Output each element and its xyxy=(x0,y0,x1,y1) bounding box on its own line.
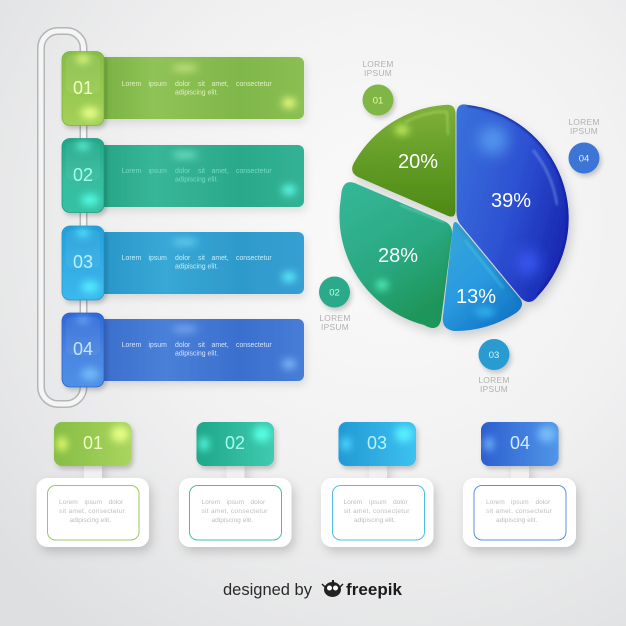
banner 02 text: sit xyxy=(198,168,205,175)
banner 04 text: adipiscing elit. xyxy=(175,350,218,358)
banner 04 text: dolor xyxy=(175,342,191,349)
icon: freepik mascot xyxy=(322,580,343,597)
banner 02 text: ipsum xyxy=(148,168,167,175)
badge xyxy=(319,276,350,308)
card text: sit amet, consectetur xyxy=(202,508,268,515)
slice: 13% light blue: 13% xyxy=(456,286,496,308)
caption: IPSUM xyxy=(480,384,508,394)
card text: adipiscing elit. xyxy=(70,517,111,524)
button 04 xyxy=(481,422,558,466)
inner outline xyxy=(474,486,566,540)
card text: Lorem xyxy=(202,499,221,506)
pipe connector xyxy=(41,31,84,404)
tab 02 number: 02 xyxy=(73,165,93,185)
card text: adipiscing elit. xyxy=(212,517,253,524)
card body xyxy=(179,462,292,547)
banner 04 text: ipsum xyxy=(148,342,167,349)
tab 01 xyxy=(62,52,104,126)
button number: 04 xyxy=(510,433,530,453)
banner 03 text: dolor xyxy=(175,255,191,262)
card text: ipsum xyxy=(84,499,103,506)
banner 01 text: Lorem xyxy=(122,81,141,88)
tab 02 xyxy=(62,138,104,212)
banner 04 text: consectetur xyxy=(236,342,272,349)
tab 03 gloss xyxy=(66,229,100,293)
caption: IPSUM xyxy=(570,126,598,136)
pie label 04: 04 xyxy=(579,154,589,164)
banner 03 xyxy=(90,232,304,294)
card text: ipsum xyxy=(369,499,387,506)
banner 03 text: consectetur xyxy=(236,255,272,262)
card 02 xyxy=(179,422,292,547)
banner 03 text: adipiscing elit. xyxy=(175,264,218,270)
slice: 28% teal: 28% xyxy=(378,245,418,267)
tab 04 xyxy=(62,313,104,387)
badge xyxy=(478,339,510,370)
panel: row 01 xyxy=(62,52,304,126)
tab 01 gloss xyxy=(66,55,100,119)
banner 02 text: consectetur xyxy=(236,168,272,175)
footer credit xyxy=(223,580,403,599)
card 03 xyxy=(321,422,434,547)
banner 02 text: amet, xyxy=(212,168,229,175)
banner 02 text: adipiscing elit. xyxy=(175,176,218,184)
banner 02 xyxy=(90,145,304,207)
caption: LOREM xyxy=(568,117,600,127)
pie label 03: 03 xyxy=(489,350,499,361)
banner 02 glows xyxy=(172,152,296,195)
panel: row 03 xyxy=(62,226,304,300)
banner 03 text: ipsum xyxy=(148,255,167,262)
button 01 xyxy=(54,422,132,466)
banner 01 text: dolor xyxy=(175,81,191,88)
button 03 xyxy=(338,422,416,466)
slice: 20% green xyxy=(352,105,456,217)
banner 01 text: adipiscing elit. xyxy=(175,90,218,96)
badge xyxy=(568,142,600,174)
card text: sit amet, consectetur xyxy=(486,508,553,515)
banner 01 text: consectetur xyxy=(236,81,272,88)
button gloss xyxy=(484,426,556,451)
card text: sit amet, consectetur xyxy=(344,508,410,515)
caption: LOREM xyxy=(362,59,394,69)
button number: 01 xyxy=(83,433,103,453)
banner 01 text: ipsum xyxy=(148,81,167,88)
tab 04 number: 04 xyxy=(73,339,93,359)
card body xyxy=(36,462,149,547)
card text: Lorem xyxy=(344,499,363,506)
banner 04 text: sit xyxy=(198,342,205,349)
pie label 02: 02 xyxy=(329,288,340,298)
pie label 03 xyxy=(478,339,510,394)
tab 01 number: 01 xyxy=(73,78,93,98)
card text: Lorem xyxy=(486,499,505,506)
card text: adipiscing elit. xyxy=(496,517,538,524)
badge xyxy=(362,84,394,116)
banner 02 text: Lorem xyxy=(122,168,141,175)
card body xyxy=(463,462,576,547)
card text: Lorem xyxy=(59,499,78,506)
freepik wordmark: freepik xyxy=(346,580,403,599)
pie label 04 xyxy=(568,117,600,174)
caption: LOREM xyxy=(319,313,351,323)
card 01 xyxy=(36,422,149,547)
pie label 01 xyxy=(362,59,394,116)
panel: row 02 xyxy=(62,138,304,212)
panel: row 04 xyxy=(62,313,304,387)
card 04 xyxy=(463,422,576,547)
banner 04 text: amet, xyxy=(212,342,229,349)
banner 04 glows xyxy=(172,326,296,369)
card text: dolor xyxy=(393,499,408,506)
slice: 39% blue: 39% xyxy=(491,190,531,212)
banner 03 glows xyxy=(172,239,296,282)
pie label 01: 01 xyxy=(373,96,383,106)
card body xyxy=(321,462,434,547)
button number: 02 xyxy=(225,433,245,453)
banner 01 text: sit xyxy=(198,81,205,88)
inner outline xyxy=(190,486,282,540)
card text: dolor xyxy=(250,499,266,506)
banner 04 text: Lorem xyxy=(122,342,141,349)
card text: dolor xyxy=(108,499,124,506)
designed by: designed by xyxy=(223,581,313,599)
banner 03 text: sit xyxy=(198,255,205,262)
banner 02 text: dolor xyxy=(175,168,191,175)
slice: 20% green: 20% xyxy=(398,151,438,173)
caption: IPSUM xyxy=(321,322,349,332)
tab 04 gloss xyxy=(66,316,100,380)
card text: adipiscing elit. xyxy=(354,517,396,524)
banner 01 text: amet, xyxy=(212,81,229,88)
button 02 xyxy=(196,422,274,466)
card text: ipsum xyxy=(511,499,529,506)
caption: IPSUM xyxy=(364,68,392,78)
card text: sit amet, consectetur xyxy=(59,508,126,515)
banner 03 text: amet, xyxy=(212,255,229,262)
card text: ipsum xyxy=(226,499,245,506)
caption: LOREM xyxy=(478,375,510,385)
inner outline xyxy=(48,486,139,540)
pie chart xyxy=(339,104,569,331)
slice: 39% blue xyxy=(456,104,569,302)
button gloss xyxy=(57,426,129,451)
banner 04 xyxy=(90,319,304,381)
pie label 02 xyxy=(319,276,351,332)
button gloss xyxy=(341,426,413,451)
banner 03 text: Lorem xyxy=(122,255,141,262)
button number: 03 xyxy=(367,433,387,453)
tab 03 xyxy=(62,226,104,300)
banner 01 xyxy=(90,57,304,119)
button gloss xyxy=(199,426,271,451)
slice: 13% light blue xyxy=(443,222,522,331)
inner outline xyxy=(332,486,424,540)
tab 02 gloss xyxy=(66,142,100,206)
tab 03 number: 03 xyxy=(73,252,93,272)
slice: 28% teal xyxy=(339,182,452,328)
card text: dolor xyxy=(536,499,551,506)
banner 01 glows xyxy=(172,65,296,108)
